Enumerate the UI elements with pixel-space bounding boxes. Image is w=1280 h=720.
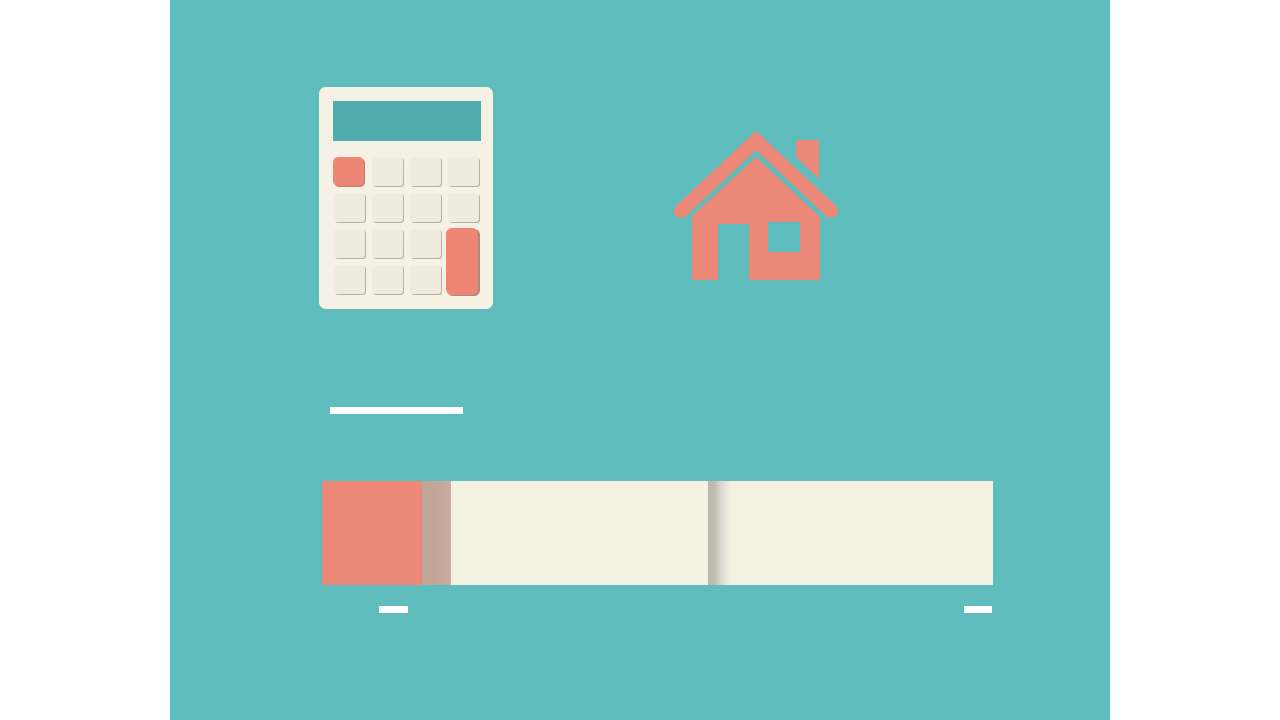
roof — [681, 140, 831, 211]
calculator screen — [333, 101, 481, 141]
calculator keys — [334, 157, 480, 295]
right axis label placeholder — [964, 606, 992, 613]
fold shadow: cream crease — [708, 481, 731, 585]
calculator body — [319, 87, 493, 309]
left axis label placeholder — [379, 606, 408, 613]
icon: house — [681, 140, 831, 280]
tall red key — [446, 228, 480, 296]
red segment — [322, 481, 422, 585]
fold shadow: red edge — [422, 481, 451, 585]
cream segment — [451, 481, 993, 585]
red key — [333, 157, 365, 187]
chimney — [796, 140, 819, 179]
background panel — [170, 0, 1110, 720]
icon: calculator — [319, 87, 493, 309]
progress bar — [322, 481, 993, 585]
house body — [692, 157, 820, 280]
heading placeholder bar — [330, 407, 463, 414]
